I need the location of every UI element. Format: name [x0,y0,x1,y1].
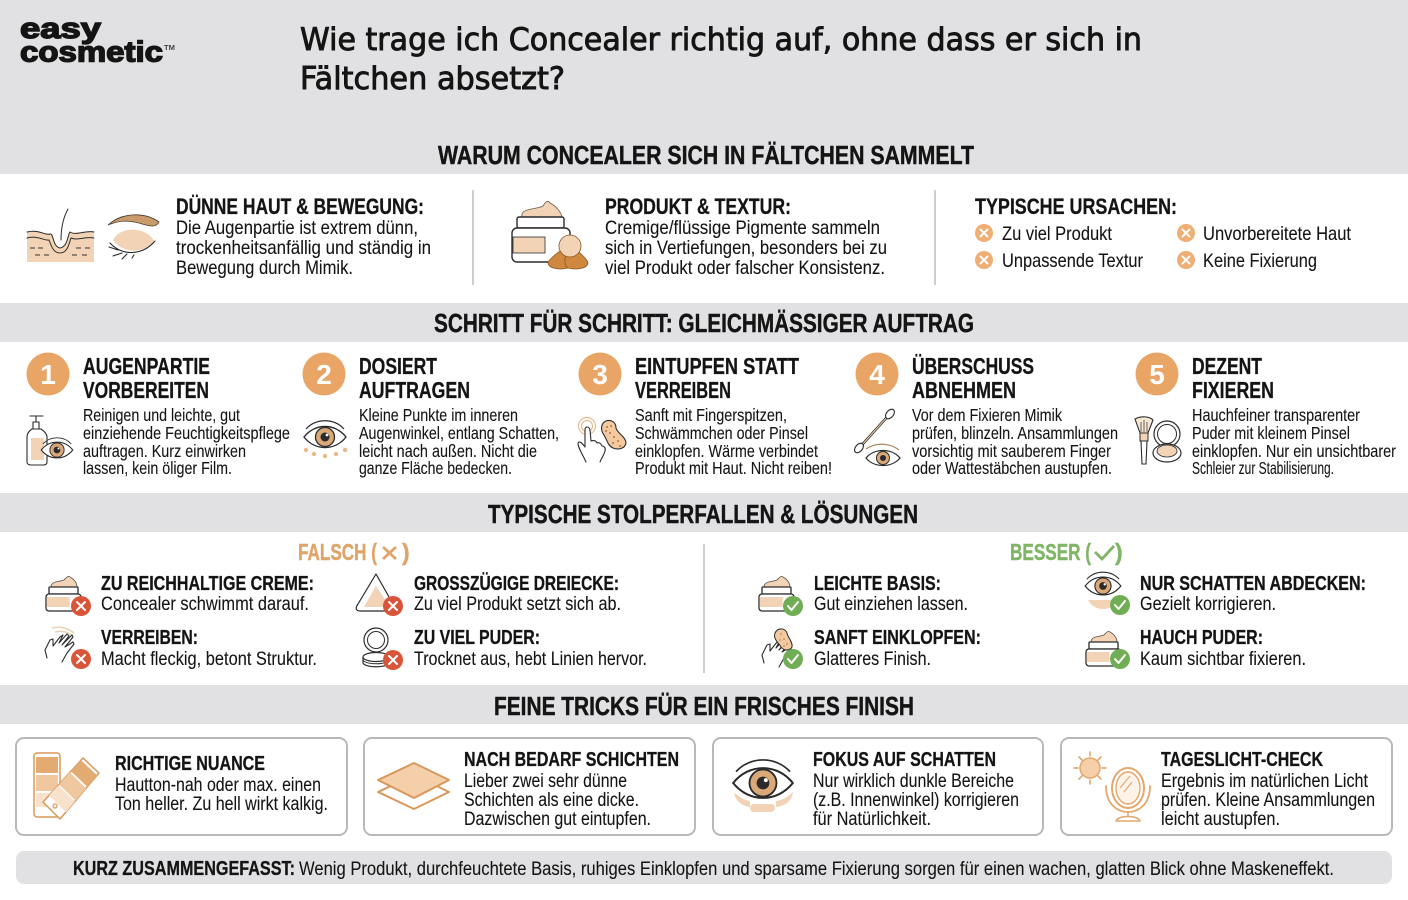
card: nach bedarf schichten: Schichten als eine dicke. [464,790,639,811]
panel: falsch [45,539,647,670]
summary bar: KURZ ZUSAMMENGEFASST: [73,858,295,880]
item: zu viel puder: Trocknet aus, hebt Linien hervor. [414,649,647,670]
card: nach bedarf schichten: Dazwischen gut eintupfen. [464,809,651,830]
icon: layers [378,763,449,809]
card: tageslicht-check: Ergebnis im natürlichen Licht [1161,771,1369,792]
text: dünne haut: trockenheitsanfällig und ständig in [176,237,431,259]
item: reichhaltige creme: ZU REICHHALTIGE CREME: [101,573,314,595]
step 3: Produkt mit Haut. Nicht reiben! [635,458,832,478]
card: fokus auf schatten [713,738,1043,835]
step 1: einziehende Feuchtigkeitspflege [83,423,290,443]
text: produkt und textur: PRODUKT & TEXTUR: [605,194,791,219]
step 2: Augenwinkel, entlang Schatten, [359,423,559,443]
heading: schritt für schritt: SCHRITT FÜR SCHRITT: GLEICHMÄSSIGER AUFTRAG [434,308,974,338]
heading: stolperfallen: TYPISCHE STOLPERFALLEN & LÖSUNGEN [488,499,918,529]
icon: skin and eye [27,209,159,262]
logo: easy [20,13,101,45]
step 4: ABNEHMEN [912,377,1016,403]
title: Fältchen absetzt? [300,61,565,97]
card: tageslicht-check: leicht austupfen. [1161,809,1280,830]
item: reichhaltige creme [46,573,314,616]
heading: falsch: ) [402,539,410,565]
icon: sun and mirror [1074,752,1150,821]
title [300,22,1142,97]
icon: eye with shadows [733,760,793,812]
summary bar [16,851,1392,884]
item: verreiben: VERREIBEN: [101,627,198,649]
item: nur schatten abdecken: Gezielt korrigieren. [1140,594,1276,615]
step 2 [302,352,559,478]
band: stolperfallen [0,493,1408,532]
list: typische ursachen: Zu viel Produkt [1002,223,1112,245]
text: produkt und textur [605,194,887,279]
icon: jar and sponges [512,201,588,269]
step 4: Vor dem Fixieren Mimik [912,405,1062,425]
list: typische ursachen: TYPISCHE URSACHEN: [975,194,1177,219]
logo: cosmetic [20,36,163,68]
item: leichte basis: Gut einziehen lassen. [814,594,968,615]
step 5: FIXIEREN [1192,377,1274,403]
icon: bottle and eye [27,416,73,465]
card: richtige nuance: Hautton-nah oder max. einen [115,775,321,796]
step 2: 2 [316,359,332,390]
card: tageslicht-check [1061,738,1392,835]
step 3: Sanft mit Fingerspitzen, [635,405,787,425]
step 3: 3 [592,359,608,390]
list: typische ursachen: Unvorbereitete Haut [1203,223,1351,245]
card: richtige nuance: Ton heller. Zu hell wirkt kalkig. [115,794,328,815]
step 1: 1 [40,359,56,390]
list: typische ursachen [975,194,1351,272]
card: richtige nuance [16,738,347,835]
card: nach bedarf schichten: NACH BEDARF SCHICHTEN [464,748,679,771]
step 4: 4 [869,359,885,390]
step 4: vorsichtig mit sauberem Finger [912,441,1111,461]
card: fokus auf schatten: FOKUS AUF SCHATTEN [813,748,996,771]
card: fokus auf schatten: für Natürlichkeit. [813,809,931,830]
heading: falsch: FALSCH ( [298,539,377,565]
icon: eye with dots [304,421,347,458]
heading: besser: BESSER ( [1010,539,1091,565]
title: Wie trage ich Concealer richtig auf, ohne dass er sich in [300,22,1142,58]
heading: warum: WARUM CONCEALER SICH IN FÄLTCHEN SAMMELT [438,140,974,170]
item: leichte basis [759,573,968,616]
item: hauch puder: Kaum sichtbar fixieren. [1140,649,1306,670]
item: sanft einklopfen [762,627,981,670]
step 2: leicht nach außen. Nicht die [359,441,537,461]
text: dünne haut: Die Augenpartie ist extrem dünn, [176,217,418,239]
logo [20,13,175,68]
item: verreiben [45,627,317,670]
icon: brush and compact [1135,417,1181,464]
step 2: Kleine Punkte im inneren [359,405,518,425]
band: schritt für schritt [0,303,1408,342]
logo: TM [164,45,175,52]
step 5: DEZENT [1192,353,1262,379]
item: nur schatten abdecken [1085,572,1366,615]
card: fokus auf schatten: (z.B. Innenwinkel) korrigieren [813,790,1019,811]
list: typische ursachen: Keine Fixierung [1203,250,1317,272]
text: dünne haut: DÜNNE HAUT & BEWEGUNG: [176,194,424,219]
item: verreiben: Macht fleckig, betont Struktur. [101,649,317,670]
item: hauch puder [1086,627,1306,670]
card: nach bedarf schichten: Lieber zwei sehr dünne [464,771,627,792]
icon: cotton swab and eye [853,408,900,466]
panel: warum [27,190,1351,285]
text: dünne haut: Bewegung durch Mimik. [176,257,353,279]
item: dreiecke: GROSSZÜGIGE DREIECKE: [414,572,619,595]
item: dreiecke: Zu viel Produkt setzt sich ab. [414,594,621,615]
step 1 [26,352,290,478]
list: typische ursachen: Unpassende Textur [1002,250,1143,272]
card: richtige nuance: RICHTIGE NUANCE [115,752,265,775]
step 4: prüfen, blinzeln. Ansammlungen [912,423,1118,443]
text: produkt und textur: sich in Vertiefungen, besonders bei zu [605,237,887,259]
item: dreiecke [356,572,621,616]
item: sanft einklopfen: Glatteres Finish. [814,649,931,670]
step 1: VORBEREITEN [83,377,209,403]
item: leichte basis: LEICHTE BASIS: [814,573,941,595]
card: fokus auf schatten: Nur wirklich dunkle Bereiche [813,771,1014,792]
step 4: oder Wattestäbchen austupfen. [912,458,1112,478]
step 2: AUFTRAGEN [359,377,470,403]
step 4: ÜBERSCHUSS [912,353,1034,379]
item: hauch puder: HAUCH PUDER: [1140,627,1263,649]
band: feine tricks [0,685,1408,724]
step 3: einklopfen. Wärme verbindet [635,441,818,461]
step 2: DOSIERT [359,353,437,379]
heading: feine tricks: FEINE TRICKS FÜR EIN FRISCHES FINISH [494,691,914,721]
icon: finger and sponge [578,418,626,462]
card: tageslicht-check: TAGESLICHT-CHECK [1161,748,1323,771]
item: reichhaltige creme: Concealer schwimmt darauf. [101,594,309,615]
step 1: lassen, kein öliger Film. [83,458,232,478]
item: zu viel puder: ZU VIEL PUDER: [414,627,540,649]
panel: besser [759,539,1366,670]
step 1: AUGENPARTIE [83,353,210,379]
step 3: VERREIBEN [635,377,731,403]
item: sanft einklopfen: SANFT EINKLOPFEN: [814,627,981,649]
step 4 [853,352,1118,478]
step 1: Reinigen und leichte, gut [83,405,240,425]
card: tageslicht-check: prüfen. Kleine Ansammlungen [1161,790,1375,811]
step 2: ganze Fläche bedecken. [359,458,512,478]
text: produkt und textur: viel Produkt oder falscher Konsistenz. [605,257,885,279]
step 1: auftragen. Kurz einwirken [83,441,246,461]
item: zu viel puder [363,627,647,670]
icon: colour swatches [34,753,99,819]
step 3 [578,352,832,478]
text: dünne haut [176,194,431,279]
step 3: EINTUPFEN STATT [635,353,799,379]
text: produkt und textur: Cremige/flüssige Pigmente sammeln [605,217,880,239]
step 5 [1135,352,1396,478]
step 3: Schwämmchen oder Pinsel [635,423,808,443]
header background [0,0,1408,174]
step 5: Hauchfeiner transparenter [1192,405,1360,425]
heading: besser: ) [1115,539,1123,565]
step 5: Schleier zur Stabilisierung. [1192,458,1334,478]
step 5: 5 [1149,359,1165,390]
step 5: Puder mit kleinem Pinsel [1192,423,1350,443]
card: nach bedarf schichten [364,738,695,835]
